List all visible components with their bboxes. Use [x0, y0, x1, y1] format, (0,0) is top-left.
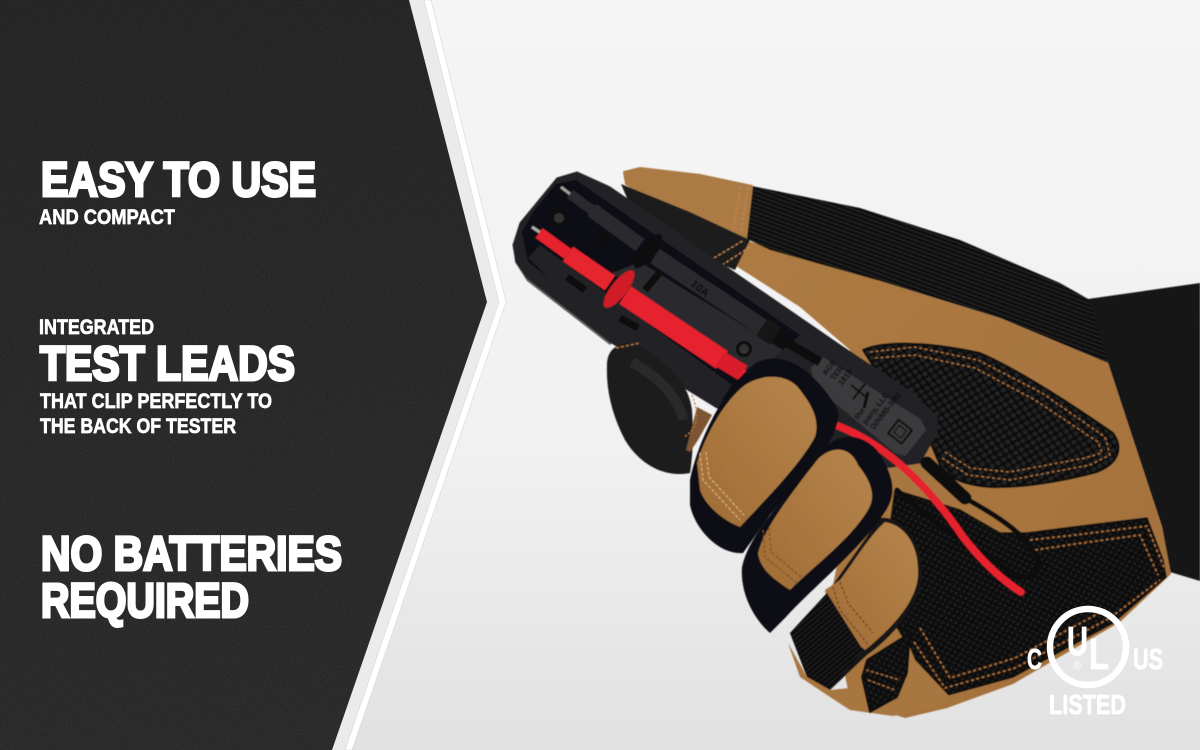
label plate — [812, 358, 925, 455]
UL listed certification mark: LISTED — [1049, 689, 1126, 720]
left finger — [607, 343, 712, 474]
heading: integrated test leads — [39, 315, 295, 438]
heading: integrated test leads: THE BACK OF TESTER — [40, 414, 236, 438]
dark textured panel — [0, 0, 490, 750]
black test lead — [561, 187, 820, 362]
screws — [551, 210, 752, 357]
label text: pany, LLC — [860, 391, 891, 426]
tester grey edge — [513, 243, 618, 345]
heading: integrated test leads: TEST LEADS — [40, 337, 295, 391]
cables — [838, 426, 1038, 592]
UL listed certification mark — [1027, 609, 1163, 720]
lower rail — [528, 245, 732, 402]
tabs — [567, 228, 662, 328]
red test lead — [532, 227, 752, 379]
label text: 1819 — [836, 367, 855, 387]
palm pad stitching — [870, 347, 1110, 480]
palm pad — [863, 344, 1118, 487]
index finger leather — [621, 184, 750, 270]
label text: the — [852, 406, 867, 421]
label text: D/NMB-3(B) — [868, 390, 903, 431]
light band beside panel — [332, 0, 500, 750]
tester body — [513, 172, 937, 470]
UL listed certification mark: US — [1133, 644, 1163, 676]
heading: no batteries required — [41, 527, 342, 628]
10A marking: 10A — [688, 278, 711, 300]
UL listed certification mark: L — [1089, 630, 1109, 679]
wrist cuff — [1088, 283, 1200, 581]
lower palm rubber — [880, 490, 1166, 697]
inner plate — [612, 262, 783, 378]
heading: no batteries required: NO BATTERIES — [41, 527, 342, 581]
tester housing — [513, 172, 937, 470]
label text: TER — [828, 364, 846, 382]
photo: gloved hand holding tester — [513, 168, 1200, 718]
index finger tip — [624, 168, 752, 238]
first finger — [690, 359, 838, 553]
lower palm stitching — [914, 526, 1165, 688]
UL listed certification mark: ® — [1073, 660, 1081, 672]
label text — [820, 358, 903, 431]
heading: easy to use: EASY TO USE — [41, 153, 316, 207]
second finger — [742, 437, 893, 633]
white chevron stripe — [345, 0, 506, 750]
UL listed certification mark: U — [1067, 618, 1088, 664]
heading: integrated test leads: INTEGRATED — [39, 315, 154, 339]
heading: no batteries required: REQUIRED — [41, 574, 249, 628]
heading: integrated test leads: THAT CLIP PERFECTLY TO — [40, 389, 272, 413]
third finger — [790, 518, 922, 690]
heading: easy to use — [39, 153, 316, 229]
index finger mesh — [745, 186, 1108, 363]
recessed channel — [522, 180, 800, 400]
label text: AGE — [820, 358, 839, 377]
heading: easy to use: AND COMPACT — [39, 205, 175, 229]
tan palm — [730, 240, 1171, 718]
bottom finger base — [788, 633, 950, 716]
label icons — [851, 384, 912, 444]
UL listed certification mark: C — [1027, 644, 1042, 676]
